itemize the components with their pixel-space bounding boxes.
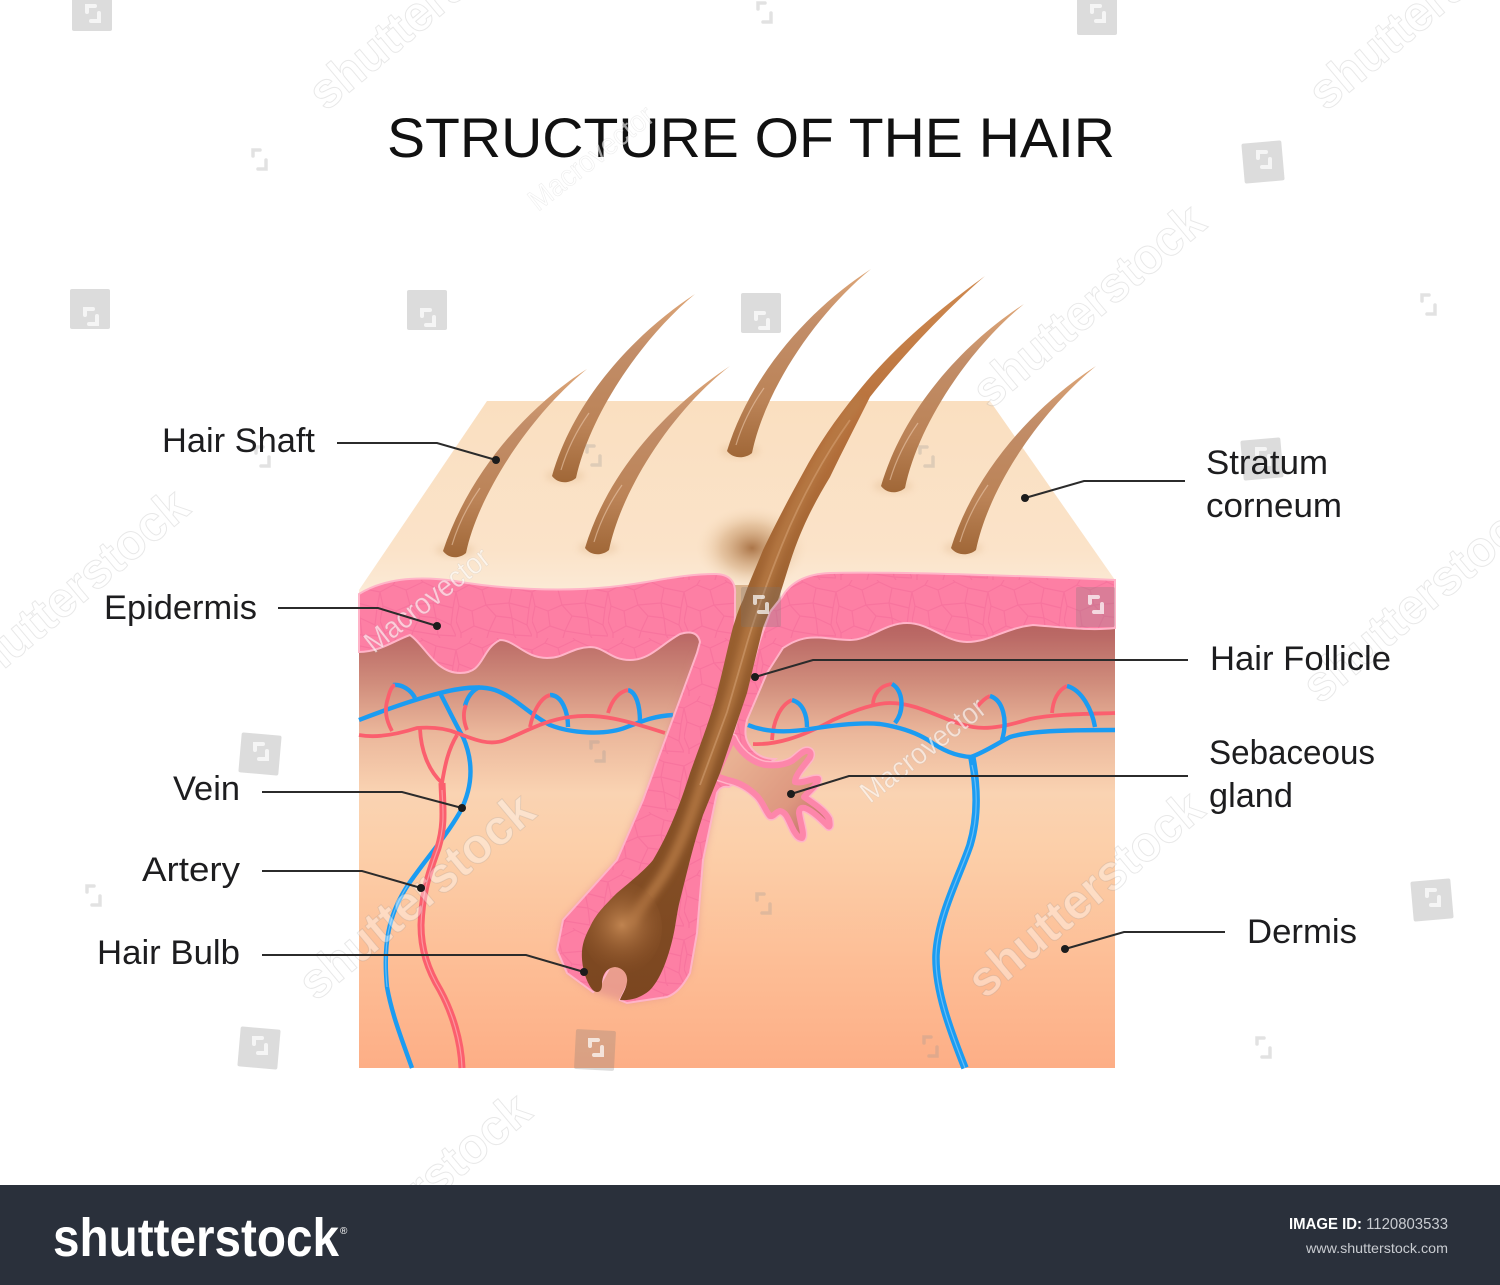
sebaceous gland (716, 738, 830, 838)
stratum corneum surface (359, 401, 1115, 640)
epidermis and follicle wall: left (359, 574, 735, 992)
label: Sebaceous gland: Sebaceous (1209, 734, 1375, 772)
watermarks: shutterstock (287, 781, 545, 1010)
watermarks: shutterstock (956, 779, 1214, 1008)
label: Epidermis: Epidermis (104, 589, 257, 627)
right blood vessels (748, 684, 1115, 1068)
label: Hair Follicle (751, 640, 1391, 681)
hair pit shadow (696, 506, 808, 590)
artery network left (359, 685, 665, 1068)
image id: IMAGE ID: 1120803533 (1289, 1216, 1448, 1233)
watermarks: Macrovector (358, 541, 497, 660)
watermarks: Macrovector (854, 691, 993, 810)
small hairs (435, 269, 1096, 557)
label: Hair Bulb: Hair Bulb (97, 934, 240, 972)
footer logo: shutterstock (53, 1208, 340, 1268)
label: Hair Follicle: Hair Follicle (1210, 640, 1391, 678)
hair 1 (435, 369, 587, 557)
label: Dermis (1061, 913, 1357, 953)
watermarks: Macrovector (522, 99, 661, 218)
footer bar (0, 1185, 1500, 1285)
label: Stratum corneum: Stratum (1206, 444, 1328, 482)
vein network right (748, 684, 1115, 1068)
watermarks: shutterstock (961, 192, 1216, 418)
label: Hair Bulb (97, 934, 588, 976)
follicle soft shadow (557, 653, 717, 1003)
vein network left (359, 685, 673, 1068)
left blood vessels (359, 685, 673, 1068)
main hair with follicle bulb (582, 276, 985, 1000)
label: Hair Shaft (162, 422, 500, 464)
registered mark: ® (340, 1226, 348, 1237)
gap shading beside hair (730, 585, 780, 635)
label: Stratum corneum (1021, 444, 1342, 525)
skin block diagram (359, 269, 1115, 1068)
website: www.shutterstock.com (1305, 1240, 1448, 1256)
label: Sebaceous gland: gland (1209, 777, 1293, 815)
follicle wall: lower right (620, 773, 738, 1003)
label: Hair Shaft: Hair Shaft (162, 422, 316, 460)
label: Vein (173, 770, 466, 812)
label: Artery (142, 851, 425, 892)
label: Stratum corneum: corneum (1206, 487, 1342, 525)
label: Dermis: Dermis (1247, 913, 1357, 951)
epidermis and upper follicle wall: right (730, 573, 1115, 770)
dermis (359, 610, 1115, 1068)
artery network right (753, 684, 1115, 744)
title: STRUCTURE OF THE HAIR (387, 106, 1115, 169)
hair 5 (873, 304, 1024, 493)
hair 6 (943, 366, 1096, 555)
hair 4 (720, 269, 871, 458)
label: Sebaceous gland (787, 734, 1375, 815)
label: Vein: Vein (173, 770, 240, 808)
hair 2 (545, 294, 695, 483)
label: Epidermis (104, 589, 441, 630)
label: Artery: Artery (142, 851, 240, 889)
hair 3 (578, 366, 730, 555)
gland outer edge (716, 738, 830, 838)
gland interior (716, 738, 830, 838)
